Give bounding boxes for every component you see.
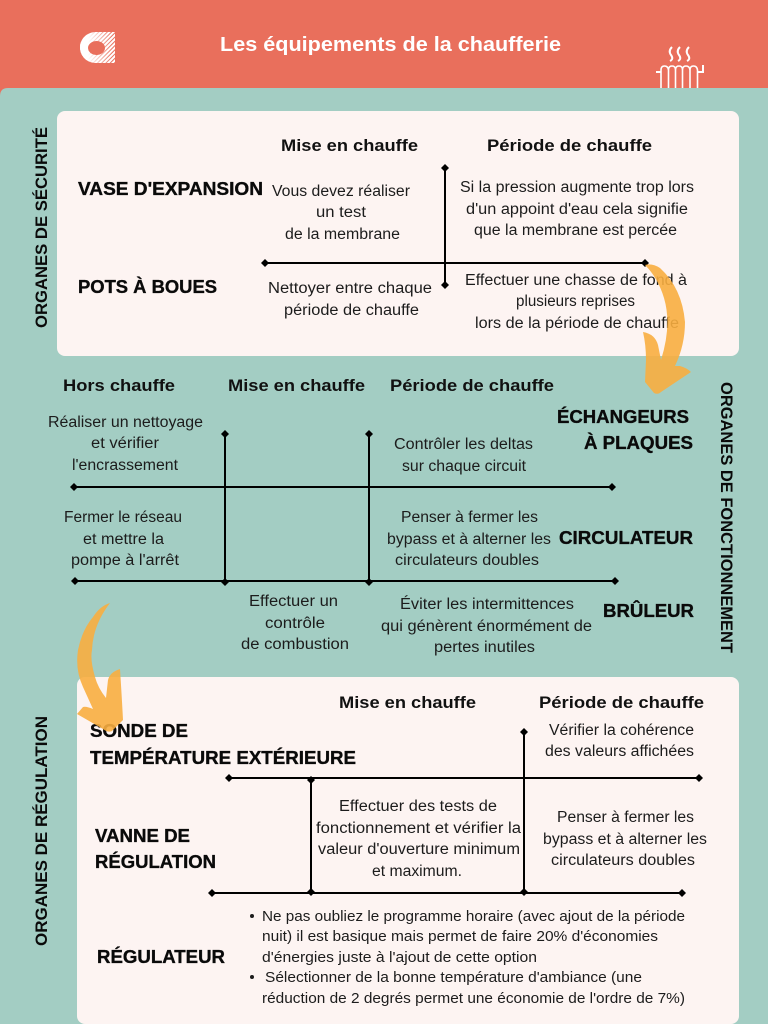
label: vanne de régulation: VANNE DE	[95, 826, 190, 846]
heading: période de chauffe: Période de chauffe	[539, 693, 704, 712]
text: bypass: circulateurs doubles	[551, 852, 695, 869]
text: intermittences: Éviter les intermittences	[400, 596, 574, 613]
bullet list: Ne pas oubliez le programme horaire (avec ajout de la période	[262, 909, 685, 925]
text: chasse de fond	[465, 272, 687, 332]
text: pression: que la membrane est percée	[474, 222, 677, 239]
text: test membrane: de la membrane	[285, 226, 400, 243]
text: deltas: Contrôler les deltas	[394, 436, 533, 453]
bullet list	[250, 909, 685, 1007]
text: tests de fonctionnement: et maximum.	[372, 863, 462, 880]
text: tests de fonctionnement: fonctionnement et vérifier la	[316, 820, 521, 837]
label: sonde de température extérieure	[90, 721, 356, 768]
text: combustion: Effectuer un	[249, 593, 338, 610]
text: bypass: Penser à fermer les	[401, 509, 538, 526]
heading: période de chauffe: Période de chauffe	[487, 136, 652, 155]
text: chasse de fond: plusieurs reprises	[516, 293, 635, 310]
text: pression: Si la pression augmente trop lors	[460, 179, 694, 196]
section label: organes de sécurité: ORGANES DE SÉCURITÉ	[32, 127, 51, 328]
label: brûleur: BRÛLEUR	[603, 600, 694, 621]
text: nettoyer: période de chauffe	[284, 302, 419, 319]
text: nettoyer	[268, 280, 432, 319]
text: nettoyer: Nettoyer entre chaque	[268, 280, 432, 297]
section label: organes de fonctionnement: ORGANES DE FONCTIONNEMENT	[717, 382, 735, 653]
text: test membrane: un test	[316, 204, 367, 221]
text: tests de fonctionnement: valeur d'ouverture minimum	[318, 841, 520, 858]
text: combustion: de combustion	[241, 636, 349, 653]
header background	[0, 0, 768, 100]
text: bypass: bypass et à alterner les	[387, 531, 551, 548]
heading: mise en chauffe: Mise en chauffe	[228, 376, 365, 395]
text: fermer le réseau	[64, 509, 182, 569]
label: sonde de température extérieure: TEMPÉRATURE EXTÉRIEURE	[90, 747, 356, 768]
label: échangeurs à plaques	[557, 406, 693, 453]
label: circulateur: CIRCULATEUR	[559, 528, 693, 548]
panel: organes de sécurité	[57, 111, 739, 356]
text: nettoyage: Réaliser un nettoyage	[48, 414, 203, 431]
text: chasse de fond: lors de la période de chauffe	[475, 315, 679, 332]
label: échangeurs à plaques: À PLAQUES	[584, 432, 693, 453]
text: chasse de fond: Effectuer une chasse de fond à	[465, 272, 687, 289]
text: tests de fonctionnement	[316, 798, 521, 880]
text: test membrane: Vous devez réaliser	[272, 183, 410, 200]
text: nettoyage: l'encrassement	[72, 457, 179, 474]
text: bypass: Penser à fermer les	[557, 809, 694, 826]
text: pression	[460, 179, 694, 239]
text: bypass	[387, 509, 551, 569]
label: pots à boues: POTS À BOUES	[78, 276, 217, 297]
text: deltas	[394, 436, 533, 475]
text: fermer le réseau: pompe à l'arrêt	[71, 552, 180, 569]
text: fermer le réseau: Fermer le réseau	[64, 509, 182, 526]
text: tests de fonctionnement: Effectuer des tests de	[339, 798, 497, 815]
text: bypass: circulateurs doubles	[395, 552, 539, 569]
heading: mise en chauffe: Mise en chauffe	[339, 693, 476, 712]
text: cohérence	[545, 722, 694, 760]
text: bypass	[543, 809, 707, 869]
label: vase d'expansion: VASE D'EXPANSION	[78, 179, 263, 199]
text: intermittences: qui génèrent énormément de	[381, 618, 592, 635]
arrow: sécurité to fonctionnement	[643, 264, 691, 394]
bullet list: d'énergies juste à l'ajout de cette option	[262, 950, 537, 966]
text: bypass: bypass et à alterner les	[543, 831, 707, 848]
title: Les équipements de la chaufferie	[220, 34, 561, 56]
text: nettoyage	[48, 414, 203, 474]
bullet list: réduction de 2 degrés permet une économie de l'ordre de 7%)	[262, 991, 685, 1007]
bullet list: nuit) il est basique mais permet de faire 20% d'économies	[262, 929, 658, 945]
text: combustion: contrôle	[265, 615, 325, 632]
heading: période de chauffe: Période de chauffe	[390, 376, 554, 395]
panel: organes de régulation	[77, 677, 739, 1024]
icon: radiator	[656, 47, 703, 88]
section label: organes de régulation: ORGANES DE RÉGULATION	[32, 716, 51, 946]
label: régulateur: RÉGULATEUR	[97, 946, 225, 967]
text: cohérence: Vérifier la cohérence	[549, 722, 694, 739]
text: deltas: sur chaque circuit	[402, 458, 527, 475]
section: organes de fonctionnement	[48, 376, 694, 656]
text: combustion	[241, 593, 349, 653]
label: vanne de régulation: RÉGULATION	[95, 851, 216, 872]
bullet list: Sélectionner de la bonne température d'ambiance (une	[265, 970, 642, 986]
text: nettoyage: et vérifier	[91, 435, 159, 452]
logo	[80, 32, 115, 63]
text: test membrane	[272, 183, 410, 243]
text: intermittences	[381, 596, 592, 656]
text: intermittences: pertes inutiles	[434, 639, 535, 656]
arrow: fonctionnement to régulation	[77, 603, 123, 732]
heading: mise en chauffe: Mise en chauffe	[281, 136, 418, 155]
text: cohérence: des valeurs affichées	[545, 743, 694, 760]
label: vanne de régulation	[95, 826, 216, 872]
text: fermer le réseau: et mettre la	[83, 531, 164, 548]
label: échangeurs à plaques: ÉCHANGEURS	[557, 406, 689, 427]
heading: hors chauffe: Hors chauffe	[63, 376, 175, 395]
label: sonde de température extérieure: SONDE DE	[90, 721, 188, 741]
text: pression: d'un appoint d'eau cela signifie	[466, 201, 688, 218]
